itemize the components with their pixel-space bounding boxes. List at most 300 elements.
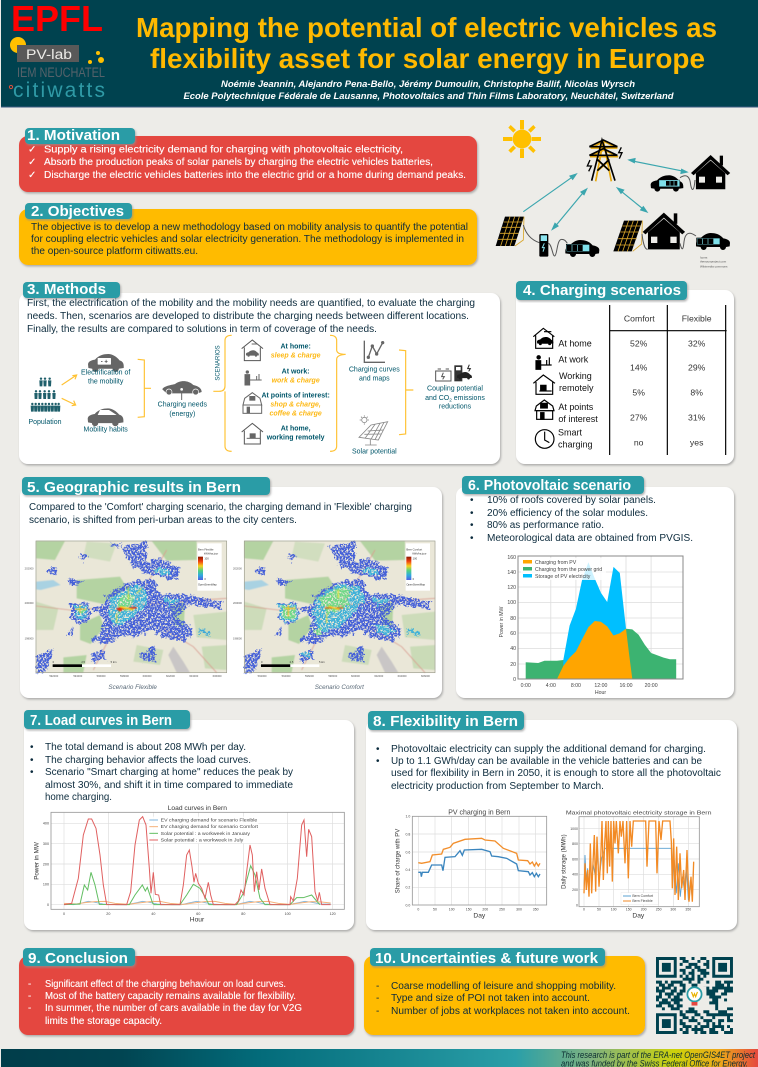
series: solar July bbox=[64, 817, 331, 905]
label: coupling potential: emissions bbox=[452, 395, 485, 402]
chart axes: 0 bbox=[63, 912, 65, 916]
chart axes bbox=[499, 555, 658, 696]
label: coupling potential: reductions bbox=[439, 403, 472, 410]
authors and affiliation: Ecole Polytechnique Fédérale de Lausanne, Photovoltaics and Thin Films Laboratory, Neuchâtel, Switzerland bbox=[184, 90, 674, 101]
label: electrification: Electrification of bbox=[81, 370, 130, 377]
methodology flow diagram bbox=[28, 335, 485, 456]
label: mobility habits: Mobility habits bbox=[84, 427, 128, 434]
conclusion list: limits the storage capacity. bbox=[45, 1016, 162, 1027]
icon: pylon bbox=[587, 140, 622, 181]
chart legend: Bern Comfort bbox=[632, 894, 653, 898]
chart legend bbox=[148, 817, 259, 844]
maps bbox=[25, 541, 435, 691]
title: Mapping the potential of electric vehicles as bbox=[136, 12, 717, 43]
chart legend: Charging from PV bbox=[535, 560, 577, 566]
scenario: working remotely bbox=[242, 423, 325, 444]
scale bar bbox=[261, 660, 326, 667]
heading: Charging scenarios: 4. Charging scenarios bbox=[523, 282, 681, 299]
series: EV comfort bbox=[64, 901, 331, 904]
line chart: maximal storage: Maximal photovoltaic electricity storage in Bern bbox=[566, 811, 711, 817]
chart frame bbox=[518, 556, 683, 679]
motivation list: ✓ bbox=[28, 157, 36, 168]
label: charging needs: Charging needs bbox=[158, 402, 207, 409]
chart axes: 40 bbox=[510, 646, 516, 652]
load curve notes: • bbox=[30, 755, 34, 766]
label: charging curves bbox=[349, 367, 400, 383]
scenario: at work: At work: bbox=[282, 369, 310, 376]
scenario: points of interest: At points of interest: bbox=[262, 392, 330, 399]
map: scenario flexible: 594000 bbox=[73, 674, 83, 678]
area chart: PV charging by hour bbox=[499, 555, 683, 696]
chart axes: 100 bbox=[43, 883, 49, 887]
map: scenario flexible: 606000 bbox=[213, 674, 222, 678]
logo: IEM Neuchatel: IEM NEUCHATEL bbox=[17, 65, 105, 80]
map: scenario flexible: 592000 bbox=[49, 674, 59, 678]
uncertainties list: - bbox=[376, 981, 379, 992]
authors and affiliation bbox=[184, 78, 674, 101]
scenario: working remotely: working remotely bbox=[266, 435, 325, 442]
flexibility notes: • bbox=[376, 744, 380, 755]
heading: Uncertainties: 10. Uncertainties & future work bbox=[375, 950, 599, 967]
scale bar: 0 bbox=[261, 660, 263, 664]
line chart: maximal storage: 400 bbox=[572, 873, 578, 877]
line chart: maximal storage: 600 bbox=[572, 857, 578, 861]
line chart: PV charging: 0 bbox=[417, 908, 419, 912]
scenario: working remotely: At home, bbox=[281, 426, 311, 433]
row labels bbox=[558, 339, 598, 450]
line chart: PV charging: Share of charge with PV bbox=[396, 829, 402, 893]
QR code bbox=[656, 957, 733, 1034]
line chart: PV charging: 350 bbox=[533, 908, 539, 912]
line chart: PV charging: 250 bbox=[499, 908, 505, 912]
heading: Geographic results: 5. Geographic results in Bern bbox=[27, 479, 241, 496]
flexibility notes: Photovoltaic electricity can supply the additional demand for charging. bbox=[391, 744, 706, 755]
chart axes: 80 bbox=[510, 616, 516, 622]
panel: 2. Objectives bbox=[19, 203, 477, 265]
conclusion list: Significant effect of the charging behaviour on load curves. bbox=[45, 979, 286, 990]
line chart: maximal storage: 0 bbox=[583, 908, 585, 912]
label: coupling potential: and CO bbox=[425, 395, 449, 402]
map: scenario flexible: 202000 bbox=[25, 566, 34, 570]
arrows bbox=[523, 159, 687, 229]
series: Bern flexible storage bbox=[584, 821, 694, 902]
heading: Objectives: 2. Objectives bbox=[31, 203, 124, 220]
charts: PV charging and storage bbox=[396, 810, 711, 920]
row labels: At work bbox=[558, 355, 589, 365]
line chart: load curves bbox=[33, 805, 344, 924]
chart legend: Charging from the power grid bbox=[535, 567, 602, 573]
table values: 31% bbox=[688, 413, 706, 423]
map: scenario flexible: 596000 bbox=[97, 674, 106, 678]
scale bar: 2.5 bbox=[290, 660, 294, 664]
map: scenario flexible bbox=[25, 541, 227, 678]
chart axes: 12:00 bbox=[594, 683, 608, 689]
label: coupling potential: 2 bbox=[449, 397, 452, 402]
line chart: PV charging: 0.0 bbox=[405, 903, 410, 907]
flexibility notes: Up to 1.1 GWh/day can be available in the vehicle batteries and can be bbox=[391, 756, 702, 767]
panel: 8. Flexibility in Bern bbox=[366, 711, 737, 930]
map: scenario flexible: 198000 bbox=[25, 636, 34, 640]
label: charging curves: and maps bbox=[359, 376, 390, 383]
table grid bbox=[610, 305, 727, 455]
load curve notes: The total demand is about 208 MWh per day. bbox=[45, 742, 246, 753]
uncertainties list bbox=[376, 981, 630, 1017]
chart legend: Bern Flexible bbox=[632, 899, 653, 903]
icon credits: Wikimedia commons bbox=[700, 265, 728, 269]
chart legend: EV charging demand for scenario Comfort bbox=[161, 824, 259, 830]
line chart: PV charging: PV charging in Bern bbox=[448, 810, 511, 817]
footer band bbox=[1, 1049, 758, 1067]
chart axes: 40 bbox=[151, 912, 155, 916]
chart axes: 100 bbox=[285, 912, 291, 916]
conclusion list: - bbox=[28, 1003, 31, 1014]
line chart: maximal storage bbox=[561, 811, 711, 920]
motivation list: ✓ bbox=[28, 144, 36, 156]
load curve notes bbox=[30, 742, 293, 803]
authors and affiliation: Noémie Jeannin, Alejandro Pena-Bello, Jérémy Dumoulin, Christophe Ballif, Nicolas Wyrsch bbox=[221, 78, 635, 89]
chart axes: 60 bbox=[196, 912, 200, 916]
chart axes: 140 bbox=[507, 570, 516, 576]
heading: Load curves: 7. Load curves in Bern bbox=[30, 712, 172, 729]
chart axes: 20:00 bbox=[645, 683, 658, 689]
house and car top right bbox=[651, 155, 730, 192]
methods text: Finally, the results are compared to solutions in term of coverage of the needs. bbox=[27, 324, 377, 335]
conclusion list bbox=[28, 979, 302, 1027]
label: electrification bbox=[81, 370, 130, 386]
chart legend: EV charging demand for scenario Flexible bbox=[161, 818, 258, 824]
header banner bbox=[1, 0, 758, 108]
motivation list: ✓ bbox=[28, 170, 36, 181]
panel: 7. Load curves in Bern bbox=[24, 710, 354, 930]
uncertainties list: Number of jobs at workplaces not taken into account. bbox=[391, 1006, 630, 1017]
panel: 9. Conclusion bbox=[19, 948, 354, 1035]
chart axes: 300 bbox=[43, 842, 49, 846]
icon: solar panel bbox=[359, 415, 388, 445]
line chart: PV charging: Day bbox=[473, 912, 486, 919]
chart legend: Storage of PV electricity bbox=[535, 574, 591, 580]
icon: sun bbox=[503, 120, 541, 158]
map: scenario comfort bbox=[233, 541, 435, 678]
chart axes: 60 bbox=[510, 631, 516, 637]
panel: 4. Charging scenarios bbox=[516, 281, 734, 464]
icon: charging car bbox=[162, 381, 202, 400]
line chart: PV charging: 200 bbox=[482, 908, 488, 912]
scale bar: 2.5 bbox=[81, 660, 86, 664]
scenario: at home bbox=[242, 340, 321, 361]
map: scenario comfort: 592000 bbox=[258, 674, 267, 678]
logo: PV-lab bbox=[10, 37, 104, 64]
photovoltaic assumptions: 10% of roofs covered by solar panels. bbox=[487, 495, 656, 506]
map: scenario flexible: 200000 bbox=[25, 601, 34, 605]
line chart: maximal storage: 150 bbox=[626, 908, 632, 912]
map: scenario comfort: 198000 bbox=[233, 636, 242, 640]
line chart: PV charging: 0.4 bbox=[405, 868, 410, 872]
map: scenario comfort: 594000 bbox=[282, 674, 291, 678]
series: EV flexible bbox=[64, 901, 331, 905]
chart gridlines bbox=[51, 812, 344, 909]
scenario: at home: sleep & charge bbox=[271, 353, 321, 360]
photovoltaic assumptions: 20% efficiency of the solar modules. bbox=[487, 508, 648, 519]
objectives text: for coupling electric vehicles and solar electricity generation. The methodology is implemented in bbox=[31, 234, 464, 245]
scenario table bbox=[533, 305, 727, 455]
uncertainties list: - bbox=[376, 993, 379, 1004]
photovoltaic assumptions: • bbox=[470, 533, 474, 544]
load curve notes: • bbox=[30, 767, 34, 778]
objectives text: the open-source platform citiwatts.eu. bbox=[31, 246, 198, 257]
uncertainties list: Coarse modelling of leisure and shopping mobility. bbox=[391, 981, 616, 992]
chart axes: 100 bbox=[507, 600, 516, 606]
scenario: points of interest: coffee & charge bbox=[270, 411, 322, 418]
map: scenario comfort: 200000 bbox=[233, 601, 242, 605]
photovoltaic assumptions: Meteorological data are obtained from PVGIS. bbox=[487, 533, 693, 544]
table values: Flexible bbox=[682, 314, 712, 324]
panel: 6. Photovoltaic scenario bbox=[456, 476, 734, 698]
flexibility notes: • bbox=[376, 756, 380, 767]
chart axes: 200 bbox=[43, 862, 49, 866]
line chart: load curves: Hour bbox=[190, 917, 205, 924]
panel: 5. Geographic results in Bern bbox=[20, 477, 442, 698]
map: scenario flexible: 600000 bbox=[143, 674, 152, 678]
caption: scenario comfort: Scenario Comfort bbox=[315, 684, 364, 691]
conclusion list: In summer, the number of cars available in the day for V2G bbox=[45, 1003, 302, 1014]
geographic text: Compared to the 'Comfort' charging scenario, the charging demand in 'Flexible' charging bbox=[29, 502, 412, 513]
row labels: charging bbox=[558, 440, 592, 450]
legend: 0 bbox=[413, 577, 415, 581]
logo: citiwatts: citiwatts bbox=[13, 79, 105, 102]
map: scenario comfort: 606000 bbox=[421, 674, 430, 678]
objectives text bbox=[31, 222, 468, 257]
line chart: PV charging: 100 bbox=[449, 908, 455, 912]
chart axes: 80 bbox=[241, 912, 245, 916]
table values bbox=[624, 314, 712, 448]
heading: Flexibility: 8. Flexibility in Bern bbox=[373, 713, 518, 730]
map: scenario flexible: 602000 bbox=[166, 674, 175, 678]
line chart: maximal storage: Daily storage (MWh) bbox=[561, 834, 567, 889]
methods text: First, the electrification of the mobility and the mobility needs are quantified, to evaluate the charging bbox=[27, 298, 475, 309]
chart title: Load curves in Bern bbox=[168, 805, 227, 812]
area: storage of PV electricity bbox=[563, 562, 626, 679]
conclusion list: - bbox=[28, 979, 31, 990]
label: scenarios: SCENARIOS bbox=[216, 345, 222, 381]
row icons bbox=[533, 328, 555, 448]
conclusion list: - bbox=[28, 991, 31, 1002]
load curve notes: home charging. bbox=[45, 792, 112, 803]
objectives text: The objective is to develop a new methodology based on mobility analysis to quantify the potential bbox=[31, 222, 468, 233]
map: scenario comfort: 602000 bbox=[374, 674, 384, 678]
chart legend: Solar potential : a workweek in July bbox=[161, 838, 244, 844]
label: charging needs: (energy) bbox=[169, 411, 195, 418]
row labels: At points bbox=[558, 402, 594, 412]
diagram: solar, grid, homes and electric vehicles bbox=[496, 120, 730, 269]
label: coupling potential: Coupling potential bbox=[427, 386, 483, 393]
photovoltaic assumptions: • bbox=[470, 520, 474, 531]
line chart: PV charging: 1.0 bbox=[405, 815, 410, 819]
table values: 27% bbox=[630, 413, 648, 423]
label: electrification: the mobility bbox=[88, 379, 124, 386]
load curve notes: The charging behavior affects the load curves. bbox=[45, 755, 251, 766]
table values: 52% bbox=[630, 339, 648, 349]
icon credits: thenounproject.com bbox=[700, 260, 727, 264]
area: grid charging bbox=[526, 629, 676, 679]
motivation list: Discharge the electric vehicles batteries into the electric grid or a home during demand peaks. bbox=[44, 170, 466, 181]
load curve notes: • bbox=[30, 742, 34, 753]
legend bbox=[406, 543, 430, 591]
scenario: at home: At home: bbox=[281, 344, 311, 351]
load curve notes: almost 30%, and shift it in time compared to immediate bbox=[45, 780, 293, 791]
scale bar bbox=[53, 660, 117, 667]
methods text: needs. Then, scenarios are developed to distribute the charging needs between different locations. bbox=[27, 311, 469, 322]
map: scenario flexible: 598000 bbox=[120, 674, 129, 678]
chart legend bbox=[621, 893, 658, 905]
scenario: at work bbox=[245, 369, 320, 385]
series: flexible share bbox=[418, 849, 540, 877]
line chart: maximal storage: 200 bbox=[572, 888, 578, 892]
heading: Photovoltaic scenario: 6. Photovoltaic scenario bbox=[468, 477, 631, 494]
line chart: maximal storage: 800 bbox=[572, 842, 578, 846]
uncertainties list: - bbox=[376, 1006, 379, 1017]
table values: 32% bbox=[688, 339, 706, 349]
legend: kWh/ha.jour bbox=[412, 552, 427, 556]
heading: Motivation: 1. Motivation bbox=[27, 127, 120, 144]
icon: curve chart bbox=[364, 341, 385, 362]
legend: 100 bbox=[413, 556, 418, 560]
legend: OpenStreetMap bbox=[198, 582, 217, 586]
chart gridlines bbox=[518, 556, 683, 679]
chart axes: 16:00 bbox=[620, 683, 633, 689]
legend: Bern Comfort bbox=[406, 548, 422, 552]
footer funding text bbox=[561, 1050, 755, 1067]
scenario: points of interest bbox=[243, 392, 330, 418]
series: comfort share bbox=[418, 838, 540, 866]
line chart: maximal storage: 50 bbox=[597, 908, 601, 912]
photovoltaic assumptions: 80% as performance ratio. bbox=[487, 520, 604, 531]
flexibility notes bbox=[376, 744, 721, 792]
row labels: Working bbox=[559, 371, 592, 381]
conclusion list: Most of the battery capacity remains available for flexibility. bbox=[45, 991, 296, 1002]
uncertainties list: Type and size of POI not taken into account. bbox=[391, 993, 590, 1004]
legend: Bern Flexible bbox=[198, 548, 214, 552]
series: solar January bbox=[64, 866, 320, 905]
scale bar: 5 km bbox=[319, 660, 326, 664]
map: scenario comfort: 202000 bbox=[233, 566, 242, 570]
table values: 5% bbox=[632, 388, 645, 398]
icon: electric car: - + bbox=[101, 359, 108, 365]
map: scenario comfort: 604000 bbox=[398, 674, 407, 678]
legend: 0 bbox=[204, 577, 206, 581]
legend bbox=[197, 543, 222, 591]
methods text bbox=[27, 298, 475, 335]
icon: battery and charging station bbox=[436, 365, 472, 381]
row labels: remotely bbox=[559, 383, 594, 393]
flow brackets and arrows bbox=[62, 335, 413, 451]
photovoltaic assumptions: • bbox=[470, 495, 474, 506]
table values: no bbox=[634, 438, 644, 448]
heading: Methods: 3. Methods bbox=[27, 281, 106, 298]
panel: 3. Methods bbox=[19, 281, 500, 464]
line chart: PV charging: 0.8 bbox=[405, 832, 410, 836]
chart axes: 8:00 bbox=[571, 683, 581, 689]
photovoltaic assumptions: • bbox=[470, 508, 474, 519]
label: solar potential: Solar potential bbox=[352, 449, 397, 456]
flexibility notes: electricity production from September to March. bbox=[391, 781, 604, 792]
chart legend bbox=[521, 558, 606, 580]
chart axes: Power in MW bbox=[499, 606, 505, 637]
icon credits bbox=[700, 256, 728, 269]
legend: OpenStreetMap bbox=[406, 582, 426, 586]
label: coupling potential bbox=[425, 386, 485, 410]
chart axes: 20 bbox=[106, 912, 110, 916]
row labels: of interest bbox=[558, 414, 598, 424]
map: scenario comfort: 596000 bbox=[305, 674, 314, 678]
line chart: maximal storage: 1000 bbox=[570, 827, 578, 831]
chart frame bbox=[51, 812, 344, 909]
line chart: PV charging: 0.6 bbox=[405, 850, 410, 854]
table values: Comfort bbox=[624, 314, 655, 324]
label: population: Population bbox=[28, 419, 62, 426]
chart axes: 400 bbox=[43, 822, 49, 826]
table values: 29% bbox=[688, 363, 706, 373]
label: charging needs bbox=[158, 402, 207, 418]
chart axes: 4:00 bbox=[546, 683, 556, 689]
motivation list bbox=[28, 144, 466, 181]
line chart: maximal storage: 250 bbox=[656, 908, 662, 912]
map: scenario flexible: 604000 bbox=[189, 674, 199, 678]
heading: Conclusion: 9. Conclusion bbox=[28, 950, 128, 967]
icon: electric car bbox=[88, 354, 124, 372]
scale bar: 0 bbox=[53, 660, 55, 664]
legend: kWh/ha.jour bbox=[204, 552, 218, 556]
motivation list: Absorb the production peaks of solar panels by charging the electric vehicles batteries, bbox=[44, 157, 433, 168]
table values: 8% bbox=[690, 388, 703, 398]
icon: population bbox=[31, 377, 60, 412]
chart axes: 120 bbox=[507, 585, 516, 591]
map: scenario comfort: 600000 bbox=[351, 674, 360, 678]
line chart: maximal storage: 300 bbox=[670, 908, 676, 912]
line chart: load curves: Power in MW bbox=[33, 842, 40, 880]
table values: 14% bbox=[630, 363, 648, 373]
panel: 1. Motivation bbox=[19, 127, 477, 192]
series: Bern comfort storage bbox=[584, 848, 694, 900]
panel, house and car bottom right bbox=[613, 213, 730, 251]
scale bar: 5 km bbox=[111, 660, 117, 664]
load curve notes: Scenario "Smart charging at home" reduces the peak by bbox=[45, 767, 293, 778]
table values: yes bbox=[690, 438, 704, 448]
chart axes: 0 bbox=[47, 903, 49, 907]
geographic text bbox=[29, 502, 412, 526]
line chart: PV charging: 150 bbox=[466, 908, 472, 912]
line chart: PV charging: 0.2 bbox=[405, 886, 410, 890]
scenario: points of interest: shop & charge, bbox=[270, 402, 321, 409]
caption: scenario flexible: Scenario Flexible bbox=[108, 684, 157, 691]
row labels: At home bbox=[558, 339, 592, 349]
label: charging curves: Charging curves bbox=[349, 367, 400, 374]
line chart: maximal storage: 200 bbox=[641, 908, 647, 912]
icon: car bbox=[88, 408, 123, 426]
row labels: Smart bbox=[558, 428, 582, 438]
geographic text: scenario, is shifted from peri-urban areas to the city centers. bbox=[29, 515, 297, 526]
logo: PV-lab: PV-lab bbox=[26, 47, 72, 62]
scenario: at work: work & charge bbox=[272, 378, 320, 385]
solar panel and charging station bbox=[496, 217, 599, 257]
title: flexibility asset for solar energy in Europe bbox=[150, 43, 705, 74]
line chart: PV charging bbox=[396, 810, 547, 919]
chart axes: 20 bbox=[510, 662, 516, 668]
motivation list: Supply a rising electricity demand for charging with photovoltaic electricity, bbox=[44, 144, 403, 156]
chart axes: 0:00 bbox=[521, 683, 531, 689]
photovoltaic assumptions bbox=[470, 495, 693, 544]
flexibility notes: used for flexibility in Bern in 2050, it is enough to store all the photovoltaic bbox=[391, 768, 721, 779]
legend: 100 bbox=[204, 556, 209, 560]
